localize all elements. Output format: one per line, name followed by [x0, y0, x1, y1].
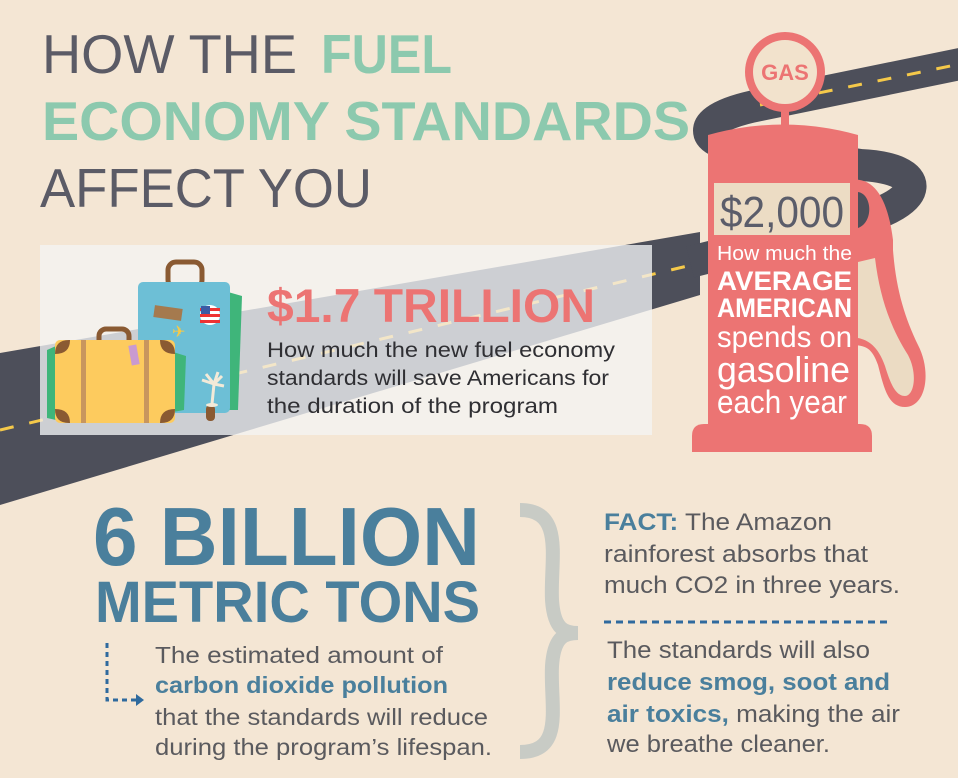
- arrow: dotted pointer: [107, 643, 144, 706]
- icon: gas sign: GAS: [761, 60, 809, 85]
- road: [0, 62, 958, 505]
- text: amazon fact: FACT: The Amazon: [604, 509, 832, 536]
- icon: suitcases: ✈: [172, 324, 185, 341]
- title: AFFECT YOU: [40, 157, 372, 219]
- text: average american spending: AMERICAN: [717, 293, 852, 323]
- text: co2 description: during the program’s lifespan.: [155, 734, 492, 760]
- brace: [520, 510, 578, 752]
- icon: suitcases: [47, 262, 242, 423]
- heading: 6 billion metric tons: 6 BILLION: [93, 490, 480, 583]
- text: average american spending: spends on: [717, 321, 852, 354]
- text: amazon fact: rainforest absorbs that: [604, 541, 868, 568]
- text: savings description: standards will save Americans for: [267, 367, 609, 390]
- heading: 6 billion metric tons: [93, 490, 480, 635]
- text: co2 description: [155, 642, 492, 760]
- title: HOW THE: [42, 23, 297, 85]
- text: average american spending: [717, 243, 852, 420]
- title: [40, 23, 690, 219]
- text: amazon fact: much CO2 in three years.: [604, 572, 900, 599]
- text: average american spending: gasoline: [717, 349, 850, 390]
- title: FUEL: [321, 23, 452, 85]
- text: smog benefits: air toxics, making the air: [607, 701, 900, 728]
- heading: 6 billion metric tons: METRIC TONS: [95, 570, 480, 635]
- text: smog benefits: we breathe cleaner.: [606, 731, 830, 758]
- display: $2,000: $2,000: [720, 188, 844, 237]
- text: amazon fact: [604, 509, 900, 599]
- text: co2 description: that the standards will reduce: [155, 704, 488, 730]
- icon: gas sign: [745, 32, 825, 127]
- text: average american spending: each year: [717, 384, 847, 420]
- text: co2 description: carbon dioxide pollution: [155, 672, 448, 698]
- text: smog benefits: reduce smog, soot and: [607, 669, 890, 696]
- text: smog benefits: The standards will also: [607, 637, 870, 664]
- text: co2 description: The estimated amount of: [155, 642, 444, 668]
- text: smog benefits: [606, 637, 900, 758]
- title: ECONOMY STANDARDS: [42, 90, 690, 152]
- text: average american spending: AVERAGE: [717, 266, 852, 296]
- text: average american spending: How much the: [717, 243, 852, 265]
- savings panel: [40, 245, 652, 435]
- heading: $1.7 trillion: $1.7 TRILLION: [267, 279, 595, 332]
- text: savings description: the duration of the program: [267, 395, 558, 418]
- icon: nozzle and hose: [850, 180, 926, 407]
- text: savings description: How much the new fuel economy: [267, 339, 616, 362]
- text: savings description: [267, 339, 616, 418]
- gas pump: [692, 32, 926, 452]
